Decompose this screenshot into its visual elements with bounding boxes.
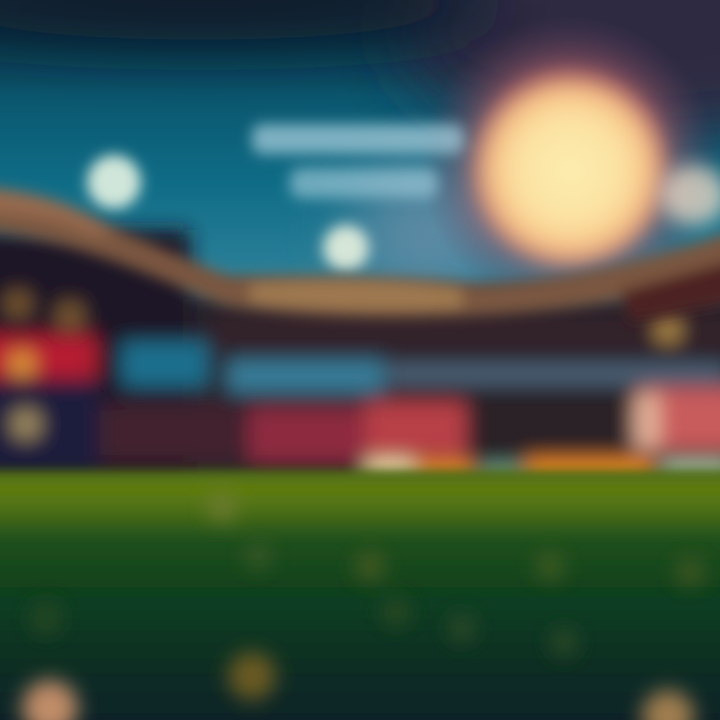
blurred title text bbox=[252, 124, 464, 198]
stadium roof bbox=[0, 186, 720, 322]
stadium stands bbox=[0, 230, 720, 490]
sun bbox=[420, 15, 720, 315]
blurred flowers bbox=[22, 492, 704, 720]
grass field bbox=[0, 470, 720, 720]
sky background bbox=[0, 0, 720, 340]
floating light orbs bbox=[87, 155, 369, 271]
